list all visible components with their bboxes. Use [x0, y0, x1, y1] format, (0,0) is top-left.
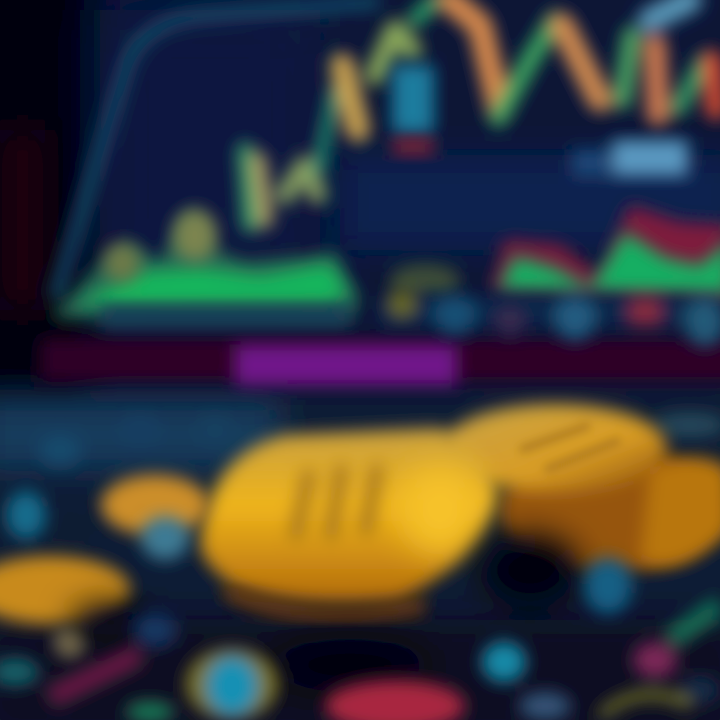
- blue candle: [392, 65, 434, 155]
- coin: upper right: [443, 404, 720, 572]
- coin: small left: [101, 475, 209, 560]
- lower field speckle: [38, 413, 720, 548]
- green area chart right: [389, 205, 720, 300]
- green area chart left: [50, 209, 360, 327]
- monitor frame edge: [55, 2, 380, 300]
- monitor base band: [40, 338, 720, 385]
- blue legend block: [572, 140, 688, 176]
- candlestick trend line: [245, 0, 716, 225]
- colored tokens: [0, 491, 720, 720]
- lower chart dots: [380, 289, 720, 346]
- coin: far left: [0, 556, 130, 658]
- coin: centre: [200, 428, 496, 616]
- dark shadow under coins: [70, 534, 580, 693]
